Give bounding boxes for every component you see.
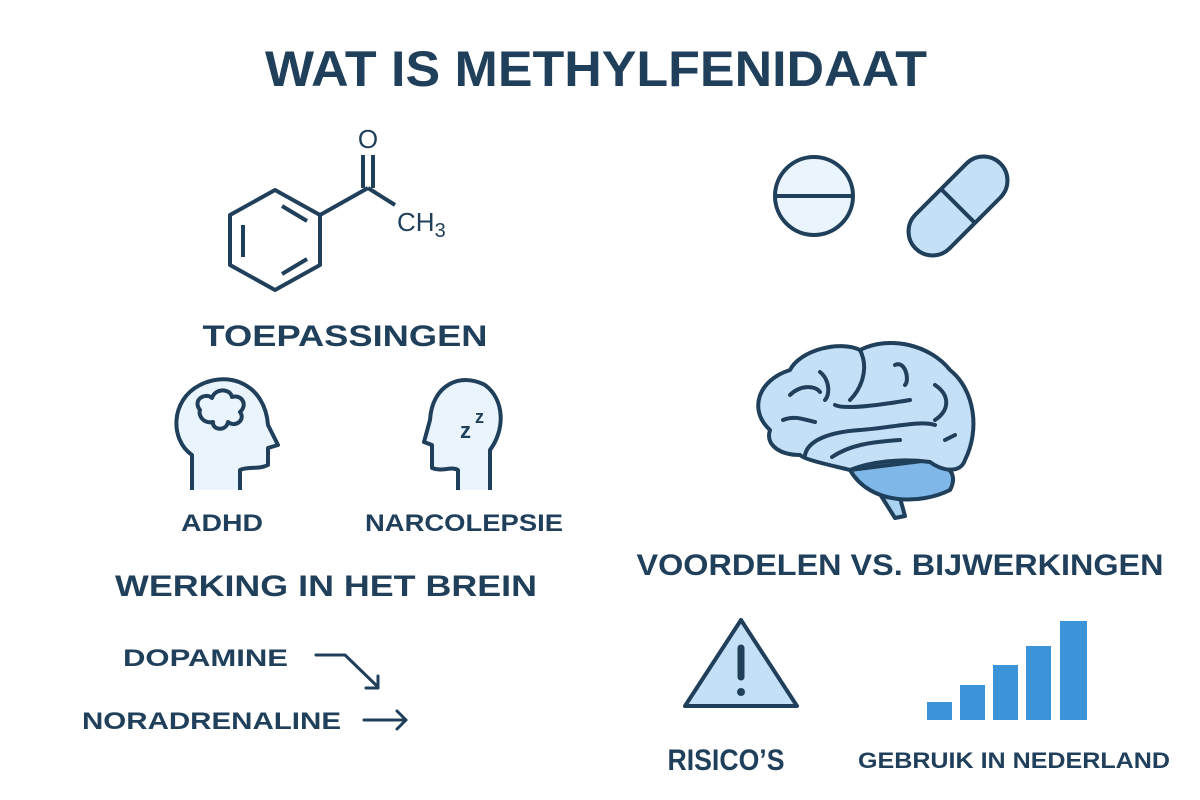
- icon: sleeping head: z: [460, 418, 471, 443]
- label: risicos: RISICO’S: [668, 744, 784, 777]
- label: adhd: ADHD: [181, 510, 263, 537]
- icon: sleeping head: z: [475, 407, 484, 427]
- icon: molecule: [230, 124, 446, 290]
- icon: molecule: CH: [397, 207, 435, 237]
- chart: usage bars: [927, 621, 1087, 720]
- heading: toepassingen: TOEPASSINGEN: [202, 320, 488, 353]
- arrow: dopamine: [316, 655, 378, 688]
- icon: sleeping head: [424, 380, 501, 490]
- label: gebruik in nederland: GEBRUIK IN NEDERLAND: [858, 748, 1170, 773]
- arrow: noradrenaline: [364, 711, 406, 729]
- icon: head with brain: [176, 379, 278, 490]
- icon: tablet: [775, 157, 853, 235]
- icon: capsule: [899, 147, 1017, 265]
- label: dopamine: DOPAMINE: [123, 645, 288, 672]
- icon: warning: [685, 620, 797, 706]
- heading: werking in het brein: WERKING IN HET BREIN: [115, 570, 537, 603]
- label: narcolepsie: NARCOLEPSIE: [365, 510, 563, 537]
- heading: voordelen vs bijwerkingen: VOORDELEN VS. BIJWERKINGEN: [636, 549, 1164, 582]
- icon: molecule: 3: [435, 220, 446, 242]
- label: noradrenaline: NORADRENALINE: [82, 708, 341, 735]
- title: WAT IS METHYLFENIDAAT: [265, 41, 927, 97]
- icon: molecule: O: [358, 124, 378, 154]
- icon: brain: [758, 343, 973, 518]
